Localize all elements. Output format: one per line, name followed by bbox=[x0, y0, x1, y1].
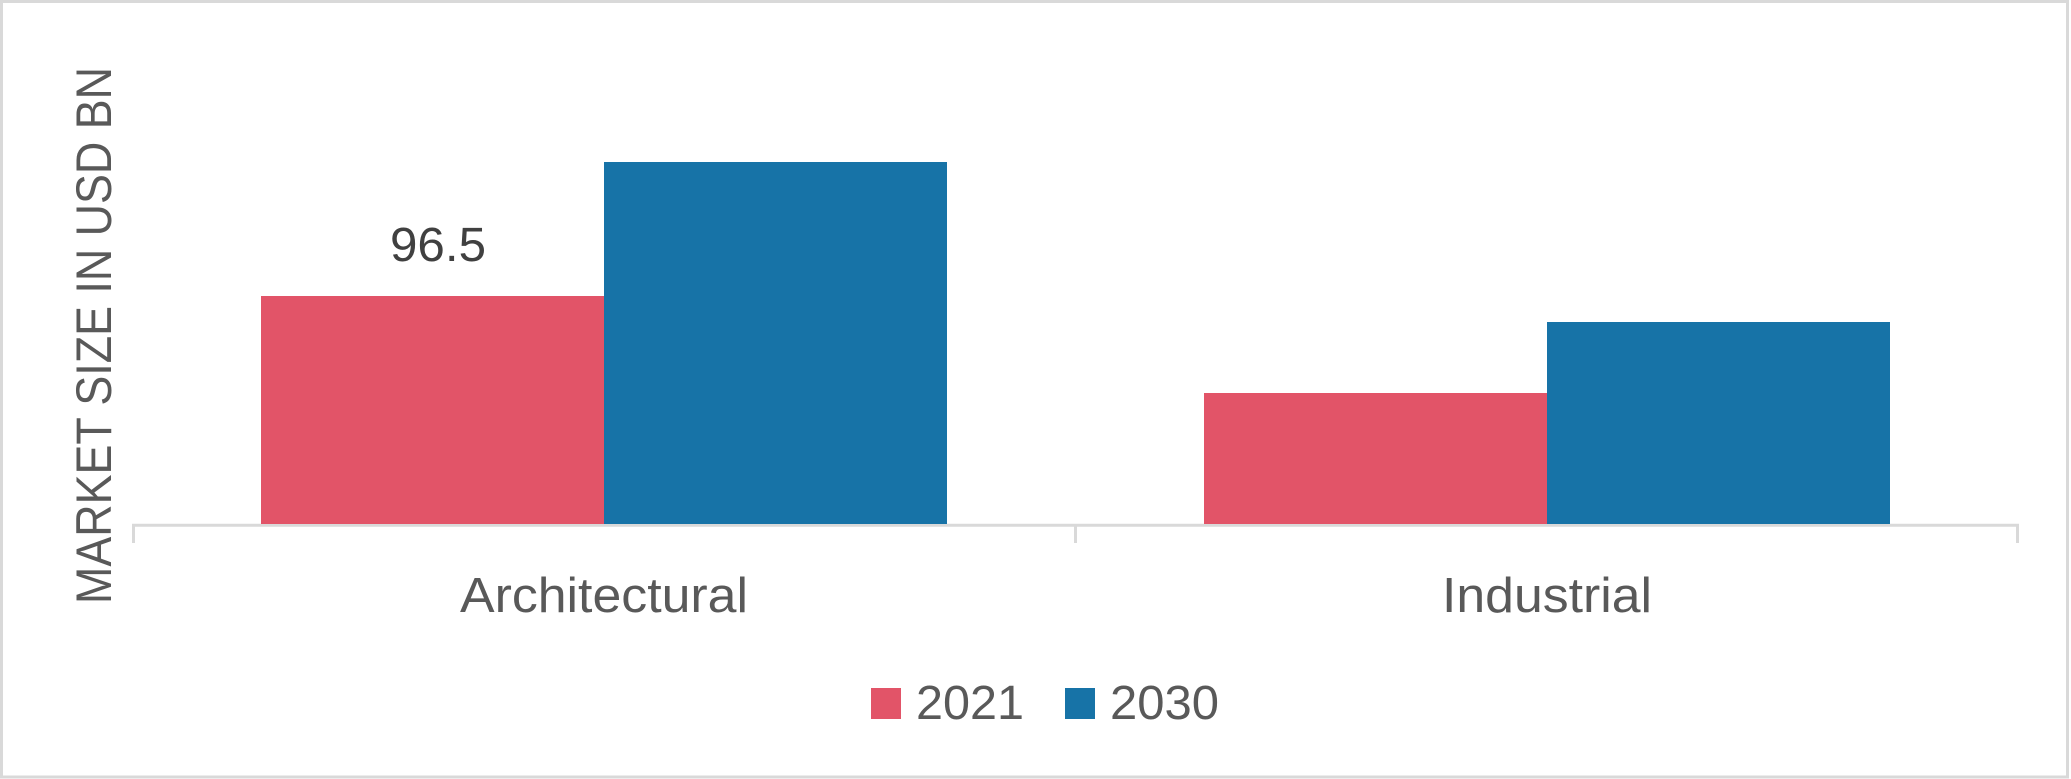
category label: Architectural: Architectural bbox=[460, 569, 748, 623]
legend label: 2030: 2030 bbox=[1110, 677, 1219, 730]
bar: Architectural 2030 bbox=[604, 162, 947, 524]
legend label: 2021: 2021 bbox=[916, 677, 1024, 730]
y axis title: MARKET SIZE IN USD BN bbox=[66, 67, 122, 604]
legend swatch: 2030 bbox=[1065, 688, 1095, 719]
group: Architectural bars bbox=[261, 162, 947, 524]
data label: 96.5: 96.5 bbox=[390, 219, 486, 272]
bar: Architectural 2021 bbox=[261, 296, 604, 524]
group: Industrial bars bbox=[1204, 322, 1890, 524]
legend swatch: 2021 bbox=[871, 688, 901, 719]
category label: Industrial: Industrial bbox=[1442, 569, 1652, 623]
legend bbox=[871, 677, 1219, 730]
x axis line with ticks bbox=[134, 525, 2018, 543]
bar: Industrial 2030 bbox=[1547, 322, 1890, 524]
bar: Industrial 2021 bbox=[1204, 393, 1547, 524]
